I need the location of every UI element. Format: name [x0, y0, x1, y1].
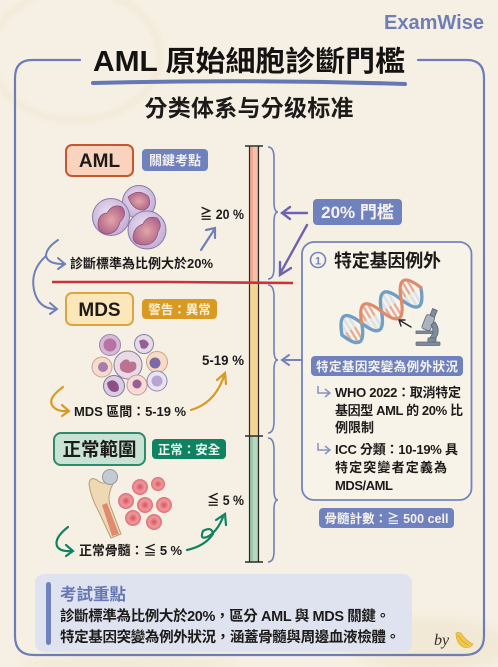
brand: ExamWise: ExamWise — [384, 12, 484, 34]
text: MDS interval: MDS 區間：5-19 % — [74, 404, 186, 419]
arrow: threshold to brace — [282, 207, 307, 219]
arrow: mutation pointer — [399, 320, 411, 327]
label: 5-19 percent: 5-19 % — [202, 352, 245, 368]
badge: warning: 警告：異常 — [148, 302, 211, 317]
arrow: panel to brace — [282, 355, 301, 365]
MDS tag: MDS — [78, 300, 121, 321]
icon: DNA helix — [334, 275, 429, 348]
signature: by banana: by — [434, 632, 450, 649]
badge: key point: 關鍵考點 — [149, 153, 201, 168]
panel: exam key points — [35, 574, 412, 652]
normal range tag — [54, 433, 145, 465]
badge: normal safe: 正常：安全 — [158, 442, 221, 457]
badge: key point — [142, 149, 208, 171]
badge: warning — [142, 299, 217, 319]
text: normal marrow: 正常骨髓：≦ 5 % — [79, 543, 182, 558]
badge: marrow count — [319, 508, 454, 528]
badge: gene mutation exception — [311, 356, 463, 376]
list item: ICC: ICC 分類：10-19% 具 — [335, 442, 458, 457]
list item: WHO 2022: 基因型 AML 的 20% 比 — [335, 403, 463, 418]
curved arrow: AML criterion — [46, 240, 65, 269]
key points text — [60, 607, 400, 646]
curved arrow: red line to MDS — [33, 256, 57, 314]
subtitle: 分类体系与分级标准 — [144, 95, 354, 121]
icon: femur bone — [89, 470, 121, 538]
list item: ICC: MDS/AML — [335, 478, 393, 493]
arrow: MDS interval up — [191, 373, 226, 410]
signature: by banana — [434, 632, 473, 649]
text: AML criterion: 診斷標準為比例大於20% — [70, 256, 213, 271]
arrow: threshold to red line — [280, 225, 307, 275]
key points text: 診斷標準為比例大於20%，區分 AML 與 MDS 關鍵。 — [60, 607, 390, 625]
badge: 20 percent threshold: 20% 門檻 — [321, 203, 394, 222]
panel heading: 特定基因例外 — [334, 250, 441, 271]
list item: WHO 2022: WHO 2022：取消特定 — [335, 385, 461, 400]
curved arrow: normal marrow — [56, 527, 73, 556]
icon: red blood cells — [118, 477, 172, 530]
threshold scale bar — [245, 146, 263, 562]
key points text: 特定基因突變為例外狀況，涵蓋骨髓與周邊血液檢體。 — [60, 628, 400, 646]
badge: marrow count: 骨髓計數：≧ 500 cell — [324, 511, 448, 526]
scale braces — [268, 147, 278, 562]
threshold red line — [52, 282, 293, 283]
AML tag — [66, 145, 133, 176]
icon: MDS cell cluster — [92, 334, 168, 396]
MDS tag — [66, 293, 133, 325]
badge: gene mutation exception: 特定基因突變為例外狀況 — [316, 359, 458, 374]
icon: microscope — [416, 309, 440, 346]
list item: WHO 2022: 例限制 — [335, 420, 374, 435]
normal range tag: 正常範圍 — [62, 439, 137, 460]
label: at most 5 percent: ≦ 5 % — [207, 492, 244, 508]
curved arrow: MDS interval — [51, 387, 69, 416]
list item: ICC: 特定突變者定義為 — [335, 460, 447, 475]
icon: AML blast cells — [92, 186, 166, 249]
title underline — [93, 81, 405, 84]
list item: ICC — [318, 442, 458, 493]
accent bar — [46, 582, 51, 645]
AML tag: AML — [79, 151, 120, 172]
label: at least 20 percent: ≧ 20 % — [200, 206, 244, 222]
key points heading: 考試重點 — [60, 584, 126, 604]
title: AML 原始細胞診斷門檻 — [93, 46, 405, 78]
badge: normal safe — [152, 439, 226, 459]
list item: WHO 2022 — [318, 385, 463, 435]
arrow: AML up to 20 percent — [201, 228, 215, 250]
badge: 20 percent threshold — [313, 199, 402, 225]
panel: specific gene exception — [302, 242, 472, 500]
arrow: normal up — [187, 514, 226, 550]
panel heading: 1 — [315, 256, 321, 268]
